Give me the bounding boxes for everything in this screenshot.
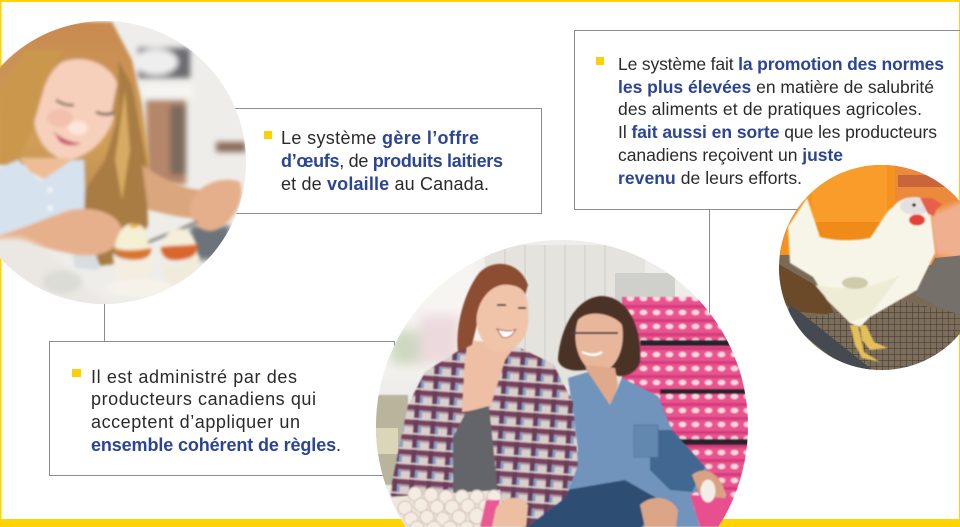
- panel: supply management: [230, 108, 542, 214]
- text: supply management: et de volaille au Canada.: [281, 174, 489, 194]
- woman 2 hair: [558, 296, 640, 376]
- text: administered by producers: acceptent d’appliquer un: [91, 412, 300, 432]
- bullet: [72, 369, 81, 377]
- egg cups: [110, 252, 152, 278]
- woman 1 grey top: [453, 406, 498, 497]
- text: supply management: d’œufs, de produits laitiers: [281, 151, 503, 171]
- text: administered by producers: [91, 367, 341, 455]
- bullet: [596, 57, 604, 65]
- text: standards and fair income: Le système fait la promotion des normes: [618, 54, 944, 74]
- woman 2 denim shirt: [560, 372, 715, 527]
- left egg: [115, 224, 150, 260]
- woman 1 hand: [492, 498, 528, 527]
- text: standards and fair income: [618, 54, 944, 188]
- bullet: [264, 131, 272, 139]
- grey cage wall: [915, 255, 960, 320]
- woman 1 face: [476, 285, 528, 352]
- photo: two women and eggs: [370, 235, 757, 527]
- machinery: [376, 394, 409, 486]
- right arm and hand: [142, 165, 205, 218]
- connector line: top box to photo: [708, 209, 710, 320]
- left arm and hand: [0, 209, 122, 256]
- text: administered by producers: Il est administré par des: [91, 367, 297, 387]
- metal rail: [785, 305, 875, 372]
- spoon: [146, 222, 198, 243]
- right egg: [162, 229, 198, 261]
- pink egg racks: [622, 297, 757, 519]
- wire floor: [806, 300, 960, 375]
- egg tray: [390, 490, 505, 527]
- photo: white hen: [775, 160, 960, 375]
- hen wattle: [909, 214, 925, 226]
- text: standards and fair income: des aliments et de pratiques agricoles.: [618, 99, 922, 119]
- neck: [20, 158, 75, 182]
- facial features: [56, 100, 74, 105]
- woman 2 neck: [585, 365, 618, 408]
- brown ledge: [779, 264, 834, 314]
- hen legs: [850, 325, 888, 362]
- orange background: [775, 160, 900, 255]
- panel: administered by producers: [50, 342, 394, 476]
- hair back: [0, 21, 150, 266]
- plate: [118, 280, 151, 294]
- woman 1 plaid shirt: [390, 346, 578, 527]
- panel: standards and fair income: [574, 30, 960, 210]
- text: supply management: [281, 128, 503, 194]
- text: supply management: Le système gère l’offre: [281, 128, 479, 148]
- text: standards and fair income: Il fait aussi en sorte que les producteurs: [618, 122, 937, 142]
- blurred foreground: [0, 234, 100, 304]
- text: administered by producers: producteurs canadiens qui: [91, 389, 316, 409]
- shirt: [0, 160, 86, 238]
- photo: girl eating eggs: [0, 20, 250, 310]
- hen comb: [920, 198, 942, 216]
- woman 2 face: [575, 314, 623, 373]
- face: [34, 59, 118, 160]
- connector line: girl photo to box: [104, 300, 106, 342]
- hair front: [84, 60, 148, 265]
- hen body: [788, 197, 935, 327]
- text: standards and fair income: les plus élevées en matière de salubrité: [618, 77, 934, 97]
- text: standards and fair income: canadiens reçoivent un juste: [618, 145, 843, 165]
- text: administered by producers: ensemble cohérent de règles.: [91, 435, 341, 455]
- text: standards and fair income: revenu de leurs efforts.: [618, 168, 802, 188]
- woman 1 neck and chest: [462, 340, 516, 412]
- hen head: [900, 197, 930, 215]
- woman 2 hands and egg: [691, 470, 726, 499]
- wall: [485, 245, 645, 385]
- woman 1 hair: [457, 264, 528, 352]
